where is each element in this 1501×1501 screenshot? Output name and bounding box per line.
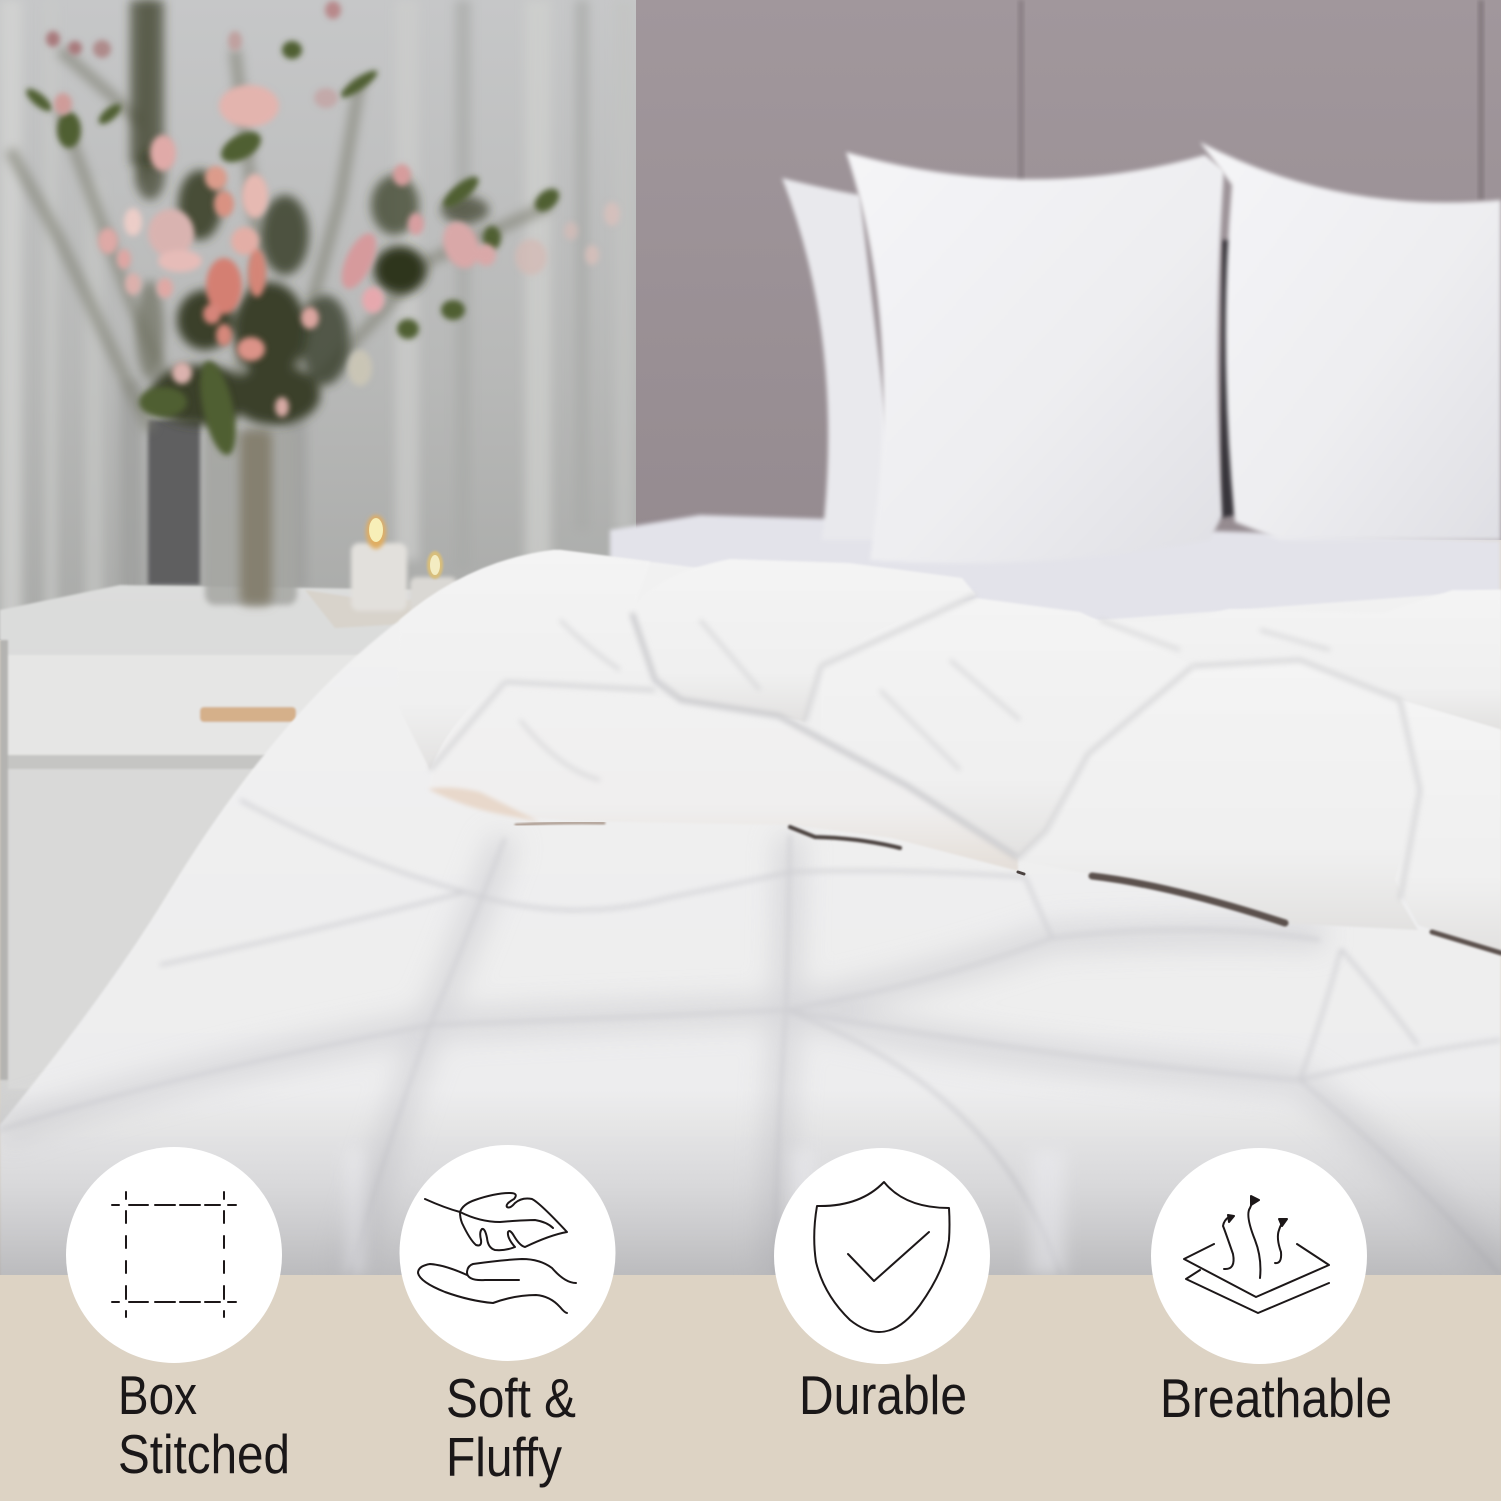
feature: soft and fluffy (400, 1145, 616, 1488)
beige footer band (0, 1275, 1501, 1501)
fold: right lobe (1018, 660, 1420, 930)
label: Fluffy (446, 1426, 562, 1488)
headboard (636, 0, 1501, 540)
label: Breathable (1160, 1367, 1392, 1429)
quilted box stitching on comforter (0, 800, 1501, 1275)
background curtain wall (0, 0, 640, 640)
circle badge (66, 1147, 282, 1363)
blossoms (46, 1, 620, 417)
fold shadow cracks (516, 823, 1501, 953)
nightstand (0, 585, 440, 1130)
label: Durable (799, 1364, 967, 1426)
icon: shield with check (814, 1182, 950, 1332)
fold: far right lobe (1395, 700, 1501, 953)
dark foliage (130, 0, 489, 425)
fold: back ripple (1100, 590, 1501, 730)
label: Stitched (118, 1423, 290, 1485)
label: Soft & (446, 1367, 576, 1429)
feature: breathable (1151, 1148, 1392, 1429)
fold: left lobe (395, 550, 655, 770)
circle badge (774, 1148, 990, 1364)
fold: centre lobe (821, 598, 1193, 858)
circle badge (1151, 1148, 1367, 1364)
soft vertical folds near bottom of comforter (345, 1150, 1065, 1275)
label: Box (118, 1364, 197, 1426)
fold: lower roll (428, 682, 1018, 871)
photo darkening toward bottom (0, 1090, 1501, 1280)
fold: middle lobe (632, 559, 976, 722)
icon: dashed stitched square (112, 1192, 236, 1317)
vase with stems (205, 430, 297, 605)
folded comforter top (395, 550, 1501, 953)
flower arrangement (10, 0, 620, 458)
icon: layers with rising air arrows (1184, 1196, 1329, 1313)
feature: durable (774, 1148, 990, 1426)
icon: leaf above hand (418, 1193, 576, 1313)
fold seams and wrinkles (430, 595, 1420, 900)
leaves (23, 41, 564, 458)
candles (305, 515, 457, 628)
comforter body (0, 550, 1501, 1280)
circle badge (400, 1145, 616, 1361)
feature: box stitched (66, 1147, 290, 1485)
bed sheet and pillows (610, 142, 1501, 640)
branches (10, 0, 550, 430)
fold: peach roll edge (428, 788, 540, 822)
